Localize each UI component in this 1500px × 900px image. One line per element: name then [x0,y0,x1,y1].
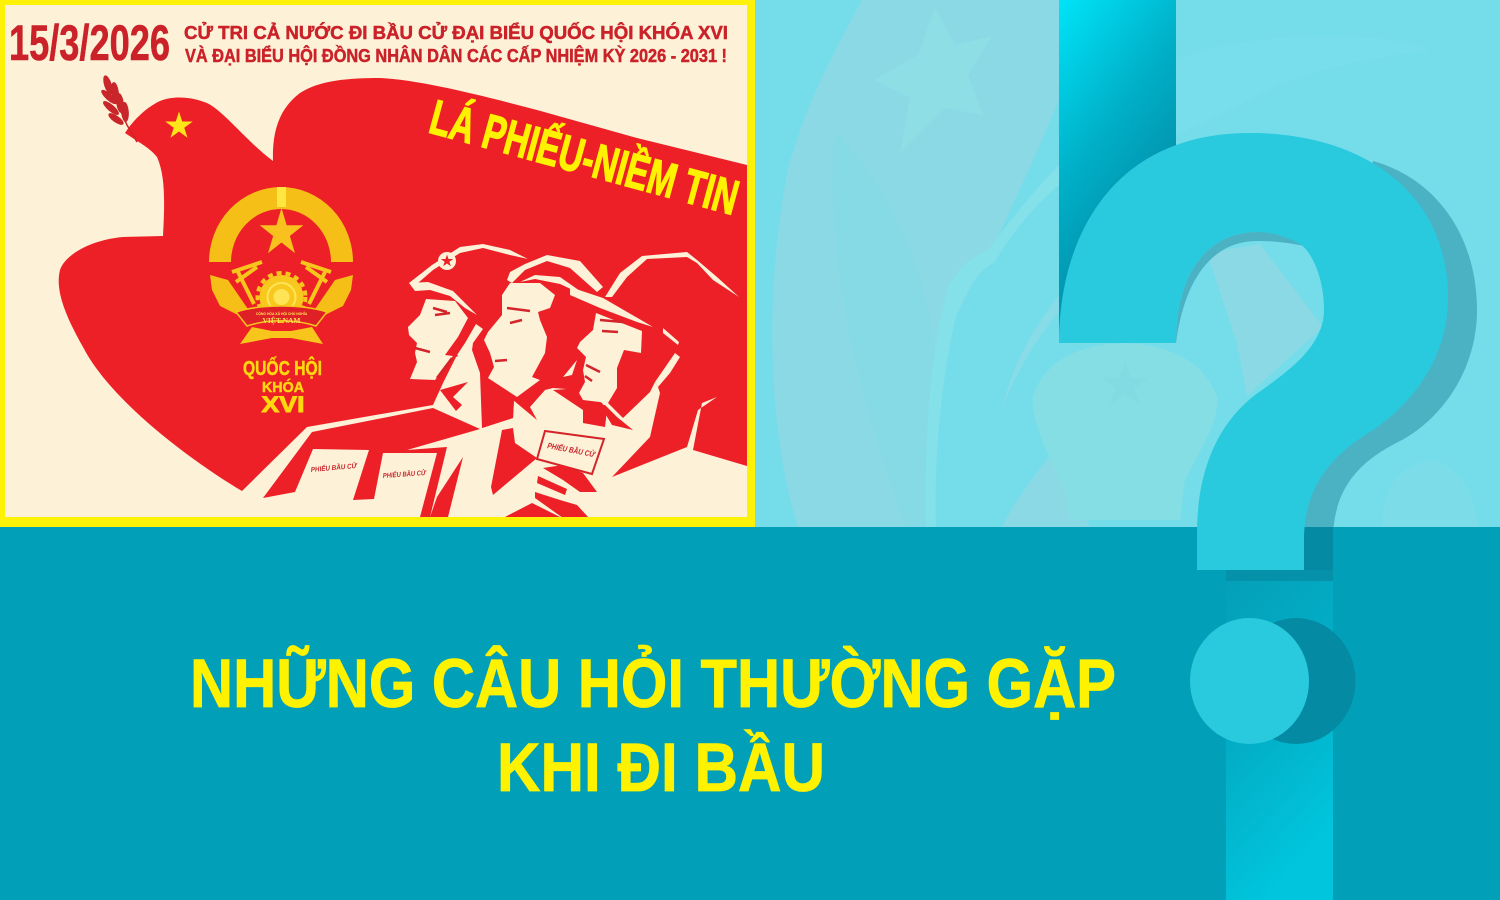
watermark: top right wash [1176,36,1430,135]
soldier one [408,244,528,380]
emblem branches [232,262,331,304]
soldier one helmet band [409,244,528,283]
soldier one helmet brim [409,282,477,315]
poster headline: VÀ ĐẠI BIỂU HỘI ĐỒNG NHÂN DÂN CÁC CẤP NHIỆM KỲ 2026 - 2031 ! [185,45,727,66]
counter crescent shadow [1176,232,1305,343]
voters' body mass [242,350,747,517]
question mark dot shadow [1236,618,1356,744]
watermark: faint emblem [1032,343,1218,520]
watermark: wedge inside question mark counter [1207,244,1323,396]
emblem star [260,208,303,253]
soldier two brim [570,287,653,327]
red dove and flag [59,78,747,517]
question mark body [1059,133,1448,570]
question mark lower shadow strip [1226,570,1333,581]
hand stripes [503,465,597,518]
olive branch [99,74,137,142]
woman hair streak [520,275,578,290]
panel: teal lower band [0,527,1500,900]
soldier two strap [655,353,680,387]
soldier one helmet badge [438,252,456,270]
soldier one face [408,299,468,380]
ballot labels [311,442,596,478]
emblem lower wheat [210,275,353,316]
panel: light blue background [755,0,1500,530]
emblem ribbon [236,306,327,326]
national emblem: VIỆT NAM [262,316,300,325]
ballot in hand [537,431,604,474]
emblem base [240,327,323,344]
woman [484,255,603,397]
question mark shadow on teal area [1304,527,1333,581]
emblem ribbon text: CỘNG HÒA XÃ HỘI CHỦ NGHĨA [256,311,308,316]
woman hair band [507,255,603,292]
watermark: inner streak [833,130,938,527]
question mark shadow on light area [1300,161,1477,540]
poster headline: CỬ TRI CẢ NƯỚC ĐI BẦU CỬ ĐẠI BIỂU QUỐC HỘI KHÓA XVI [184,22,728,43]
poster cream background [5,5,747,517]
woman face [484,283,555,397]
red sleeve and ballot frames [263,380,633,517]
soldier two neck shade [618,368,626,386]
emblem caption [243,356,322,417]
banner slogan: LÁ PHIẾU-NIỀM TIN [424,91,744,226]
soldier two strip [663,328,679,345]
title: NHỮNG CÂU HỎI THƯỜNG GẶP [190,645,1116,722]
ballot labels: PHIẾU BẦU CỬ [310,460,358,474]
ballot labels: PHIẾU BẦU CỬ [547,440,597,459]
soldier two helmet band [605,252,739,297]
soldier two face [577,313,642,403]
emblem gear [258,273,306,321]
title: KHI ĐI BẦU [497,729,825,806]
emblem wheat ring [220,198,342,262]
national emblem [210,187,353,344]
panel: election poster [0,0,755,527]
poster yellow frame [0,0,755,527]
soldier one facial features [415,308,452,378]
soldier one strap [457,324,483,356]
dove star [165,112,193,138]
watermark: curved ribbon [926,165,1059,527]
emblem ring highlight [277,187,286,207]
gradient bar behind question mark [1059,0,1176,343]
poster headline [184,22,728,66]
watermark: large pale band [772,0,1059,527]
question mark dot [1190,618,1309,744]
ballot labels: PHIẾU BẦU CỬ [382,467,427,480]
woman facial features [495,308,530,361]
watermark: star [874,8,992,153]
big question mark graphic [1059,0,1477,900]
poster date: 15/3/2026 [9,15,170,71]
gradient stem below question mark [1226,570,1333,900]
illustration: three voters [242,244,747,518]
watermark: wedge behind bottom [1002,453,1090,527]
emblem caption: KHÓA [262,378,304,396]
watermark: second ribbon [1002,295,1059,409]
soldier two facial features [585,320,623,381]
emblem caption: QUỐC HỘI [243,356,322,380]
watermark: right arc [1383,460,1477,527]
woman hair sliver [563,360,577,377]
title [190,645,1116,806]
soldier two [570,252,739,403]
emblem caption: XVI [262,392,304,417]
